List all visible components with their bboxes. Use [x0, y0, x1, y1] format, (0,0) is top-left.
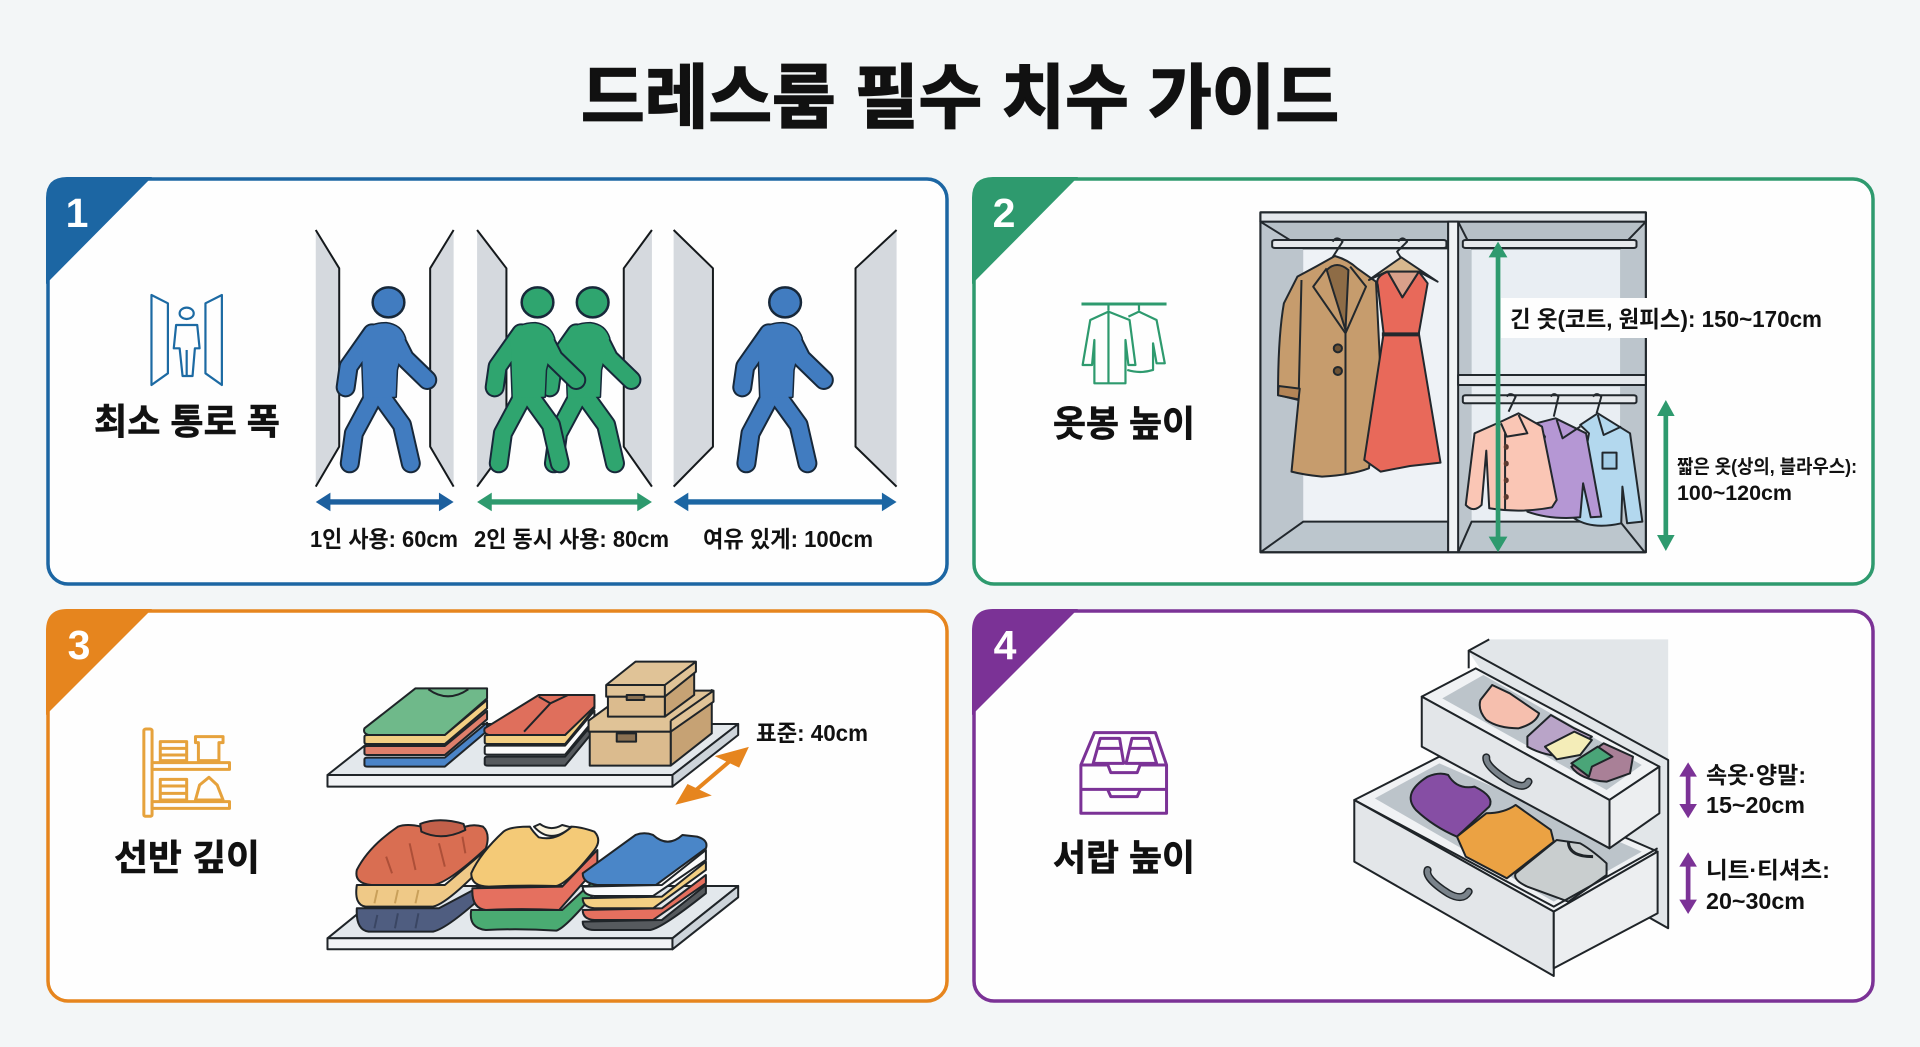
upper shelf with clothes and boxes	[327, 662, 738, 787]
label: long clothes: 긴 옷(코트, 원피스): 150~170cm	[1510, 306, 1822, 332]
short clothes arrow	[1657, 400, 1675, 551]
label: two people: 2인 동시 사용: 80cm	[474, 526, 669, 552]
coat and dress	[1278, 238, 1441, 477]
knit label line 2: 20~30cm	[1706, 888, 1805, 914]
long clothes arrow	[1489, 242, 1507, 552]
short clothes label line 1: 짧은 옷(상의, 블라우스):	[1677, 456, 1857, 478]
panel 2 heading: 옷봉 높이	[1053, 403, 1195, 444]
panel 1 card	[48, 179, 947, 584]
panel 3 heading: 선반 깊이	[114, 837, 260, 878]
icon: person in passage	[151, 295, 222, 385]
panel 1 number badge	[46, 177, 152, 284]
wardrobe	[1260, 212, 1646, 552]
short clothes label line 2: 100~120cm	[1677, 482, 1792, 505]
panel: drawer height	[972, 609, 1873, 1001]
label: knit and t-shirts	[1706, 857, 1830, 914]
panel 4 number: 4	[994, 622, 1017, 668]
label: underwear and socks	[1706, 762, 1806, 818]
panel 4 heading: 서랍 높이	[1053, 837, 1195, 878]
title: 드레스룸 필수 치수 가이드	[581, 59, 1339, 137]
knit label line 1: 니트·티셔츠:	[1706, 857, 1830, 883]
icon: hanging clothes	[1081, 304, 1167, 383]
panel 4 number badge	[972, 609, 1078, 715]
walking people	[346, 287, 824, 463]
width arrows	[316, 493, 897, 511]
upper drawer arrow	[1679, 762, 1697, 818]
panel: shelf depth	[46, 609, 947, 1001]
long clothes label backing	[1501, 298, 1677, 338]
underwear label line 1: 속옷·양말:	[1706, 762, 1806, 788]
underwear label line 2: 15~20cm	[1706, 792, 1805, 818]
panel 3 card	[48, 611, 947, 1001]
panel 3 number badge	[46, 609, 152, 715]
panel 2 number badge	[972, 177, 1078, 284]
lower drawer arrow	[1679, 852, 1697, 914]
label: short clothes	[1677, 456, 1857, 505]
icon: shelf	[144, 729, 230, 816]
icon: drawer	[1081, 733, 1167, 813]
depth arrow	[680, 750, 745, 802]
panel: hanging rod height	[972, 177, 1873, 584]
panel: minimum passage width	[46, 177, 947, 584]
drawers illustration	[1354, 639, 1668, 976]
label: one person: 1인 사용: 60cm	[310, 526, 458, 552]
panel 1 heading: 최소 통로 폭	[94, 401, 280, 442]
lower shelf with sweaters	[327, 820, 738, 949]
label: roomy: 여유 있게: 100cm	[703, 526, 873, 552]
corridor walls	[316, 230, 897, 487]
panel 2 card	[974, 179, 1873, 584]
panel 4 card	[974, 611, 1873, 1001]
short shirts	[1466, 394, 1642, 526]
panel 1 number: 1	[66, 190, 88, 236]
panel 3 number: 3	[68, 622, 90, 668]
panel 2 number: 2	[993, 190, 1015, 236]
label: standard depth: 표준: 40cm	[756, 720, 868, 746]
